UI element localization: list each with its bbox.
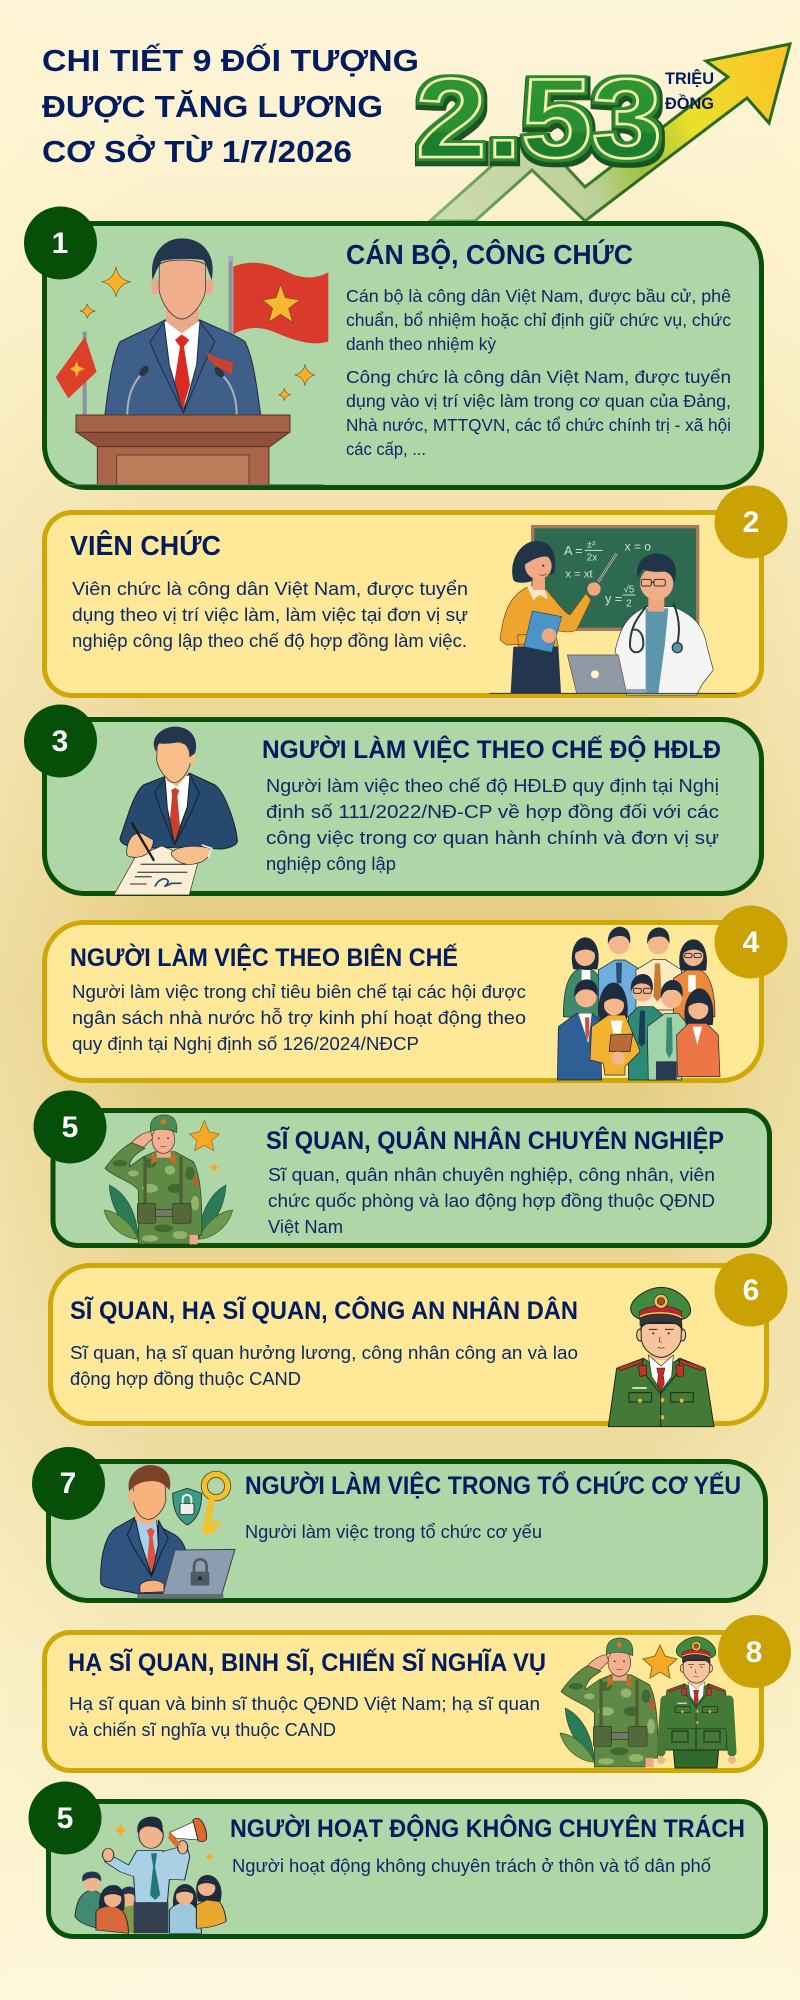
icon: teacher and doctor: ±² xyxy=(587,540,596,551)
text block: Nhà nước, MTTQVN, các tổ chức chính trị - xã hội xyxy=(346,415,731,435)
text block: Người hoạt động không chuyên trách ở thôn và tổ dân phố xyxy=(232,1856,711,1876)
text block: định số 111/2022/NĐ-CP về hợp đồng đối với các xyxy=(266,802,719,822)
panel 7: người làm việc trong tổ chức cơ yếu xyxy=(32,1447,766,1600)
text block xyxy=(268,1165,715,1237)
text block xyxy=(72,982,526,1054)
heading: NGƯỜI LÀM VIỆC TRONG TỔ CHỨC CƠ YẾU xyxy=(245,1470,741,1500)
text block: các cấp, ... xyxy=(346,439,426,459)
heading: VIÊN CHỨC xyxy=(70,530,221,561)
icon: teacher and doctor: y = xyxy=(605,592,622,606)
icon: teacher and doctor: A = xyxy=(564,544,583,558)
icon: teacher and doctor: √5 xyxy=(623,583,635,595)
text block: Hạ sĩ quan và binh sĩ thuộc QĐND Việt Nam; hạ sĩ quan xyxy=(69,1694,540,1714)
icon: group of staff xyxy=(557,927,720,1080)
heading: NGƯỜI LÀM VIỆC THEO BIÊN CHẾ xyxy=(70,942,458,972)
panel 9: người hoạt động không chuyên trách xyxy=(28,1782,766,1936)
panel 4: người làm việc theo biên chế xyxy=(44,906,788,1080)
heading: NGƯỜI HOẠT ĐỘNG KHÔNG CHUYÊN TRÁCH xyxy=(230,1813,745,1843)
text block: Việt Nam xyxy=(268,1217,343,1237)
icon: teacher and doctor: 2x xyxy=(587,552,597,563)
arrow: rising zigzag xyxy=(430,44,790,221)
heading: NGƯỜI LÀM VIỆC THEO CHẾ ĐỘ HĐLĐ xyxy=(262,734,721,764)
text block: chuẩn, bổ nhiệm hoặc chỉ định giữ chức vụ, chức xyxy=(346,310,731,330)
icon: man signing a contract xyxy=(114,727,237,895)
heading: CÁN BỘ, CÔNG CHỨC xyxy=(346,238,633,270)
unit label xyxy=(665,69,714,113)
number badge 5 xyxy=(34,1090,106,1164)
icon: teacher and doctor: x = xt xyxy=(565,569,594,581)
panel 8: hạ sĩ quan, binh sĩ, chiến sĩ nghĩa vụ xyxy=(44,1615,791,1770)
number badge 7 xyxy=(32,1447,105,1520)
title xyxy=(42,42,419,169)
panel 3: người làm việc theo chế độ HĐLĐ xyxy=(24,704,762,895)
heading: SĨ QUAN, QUÂN NHÂN CHUYÊN NGHIỆP xyxy=(266,1125,724,1155)
icon: speaker with megaphone and crowd xyxy=(75,1817,226,1933)
icon: saluting soldier xyxy=(104,1115,233,1244)
text block: Người làm việc trong chỉ tiêu biên chế tại các hội được xyxy=(72,982,526,1002)
icon: man with laptop, shield and key xyxy=(101,1465,235,1599)
text block: và chiến sĩ nghĩa vụ thuộc CAND xyxy=(69,1720,336,1740)
title: CHI TIẾT 9 ĐỐI TƯỢNG xyxy=(42,42,419,78)
figure: 2.53: 2.53 xyxy=(416,56,662,181)
text block xyxy=(69,1694,540,1740)
number badge 9, printed as 5 xyxy=(28,1782,102,1854)
text block: dụng theo vị trí việc làm, làm việc tại đơn vị sự xyxy=(72,605,468,625)
text block: Người làm việc theo chế độ HĐLĐ quy định tại Nghị xyxy=(266,776,719,796)
text block: Viên chức là công dân Việt Nam, được tuyển xyxy=(72,579,468,599)
text block: Cán bộ là công dân Việt Nam, được bầu cử, phê xyxy=(346,286,731,306)
number badge 8: 8 xyxy=(746,1636,762,1669)
text block: động hợp đồng thuộc CAND xyxy=(70,1369,301,1389)
number badge 1: 1 xyxy=(52,227,68,260)
text block xyxy=(346,286,731,459)
number badge 4 xyxy=(714,906,788,978)
title: ĐƯỢC TĂNG LƯƠNG xyxy=(42,89,383,124)
panel 6: sĩ quan, hạ sĩ quan, công an nhân dân xyxy=(50,1254,788,1427)
text block: Sĩ quan, hạ sĩ quan hưởng lương, công nhân công an và lao xyxy=(70,1343,578,1363)
text block xyxy=(266,776,719,874)
number badge 6: 6 xyxy=(743,1274,759,1307)
text block: dụng vào vị trí việc làm trong cơ quan của Đảng, xyxy=(346,391,731,411)
number badge 4: 4 xyxy=(743,926,760,959)
panel 2: viên chức xyxy=(44,486,788,696)
text block: Sĩ quan, quân nhân chuyên nghiệp, công nhân, viên xyxy=(268,1165,715,1185)
panel 1: cán bộ, công chức xyxy=(24,206,762,488)
icon: police officer xyxy=(608,1287,714,1427)
heading: HẠ SĨ QUAN, BINH SĨ, CHIẾN SĨ NGHĨA VỤ xyxy=(68,1647,546,1677)
title: CƠ SỞ TỪ 1/7/2026 xyxy=(42,133,352,169)
number badge 3: 3 xyxy=(52,725,68,758)
text block xyxy=(70,1343,578,1389)
number badge 1 xyxy=(24,206,97,280)
number badge 3 xyxy=(24,704,97,778)
unit label: TRIỆU xyxy=(665,69,714,88)
icon: speaker at podium xyxy=(56,238,328,485)
icon: teacher and doctor xyxy=(489,527,737,695)
icon: teacher and doctor: x = o xyxy=(625,539,651,553)
number badge 7: 7 xyxy=(60,1467,76,1500)
text block: nghiệp công lập xyxy=(266,854,396,874)
number badge 2: 2 xyxy=(743,506,759,539)
text block: công việc trong cơ quan hành chính và đơn vị sự xyxy=(266,828,719,848)
unit label: ĐỒNG xyxy=(665,94,714,113)
icon: teacher and doctor: 2 xyxy=(626,598,632,609)
number badge 2 xyxy=(714,486,788,558)
number badge 8 xyxy=(718,1615,791,1688)
text block: ngân sách nhà nước hỗ trợ kinh phí hoạt động theo xyxy=(72,1007,526,1028)
text block: Người làm việc trong tổ chức cơ yếu xyxy=(245,1522,542,1542)
number badge 9, printed as 5: 5 xyxy=(57,1802,73,1835)
text block: danh theo nhiệm kỳ xyxy=(346,334,496,354)
panel 5: sĩ quan, quân nhân chuyên nghiệp xyxy=(34,1090,770,1246)
icon: soldier and police officer xyxy=(560,1637,736,1768)
text block: quy định tại Nghị định số 126/2024/NĐCP xyxy=(72,1034,419,1054)
text block: chức quốc phòng và lao động hợp đồng thuộc QĐND xyxy=(268,1191,715,1211)
number badge 6 xyxy=(714,1254,788,1326)
heading: SĨ QUAN, HẠ SĨ QUAN, CÔNG AN NHÂN DÂN xyxy=(70,1295,578,1325)
text block: nghiệp công lập theo chế độ hợp đồng làm việc. xyxy=(72,631,467,651)
number badge 5: 5 xyxy=(62,1111,78,1144)
text block xyxy=(72,579,468,651)
text block: Công chức là công dân Việt Nam, được tuyển xyxy=(346,367,731,387)
